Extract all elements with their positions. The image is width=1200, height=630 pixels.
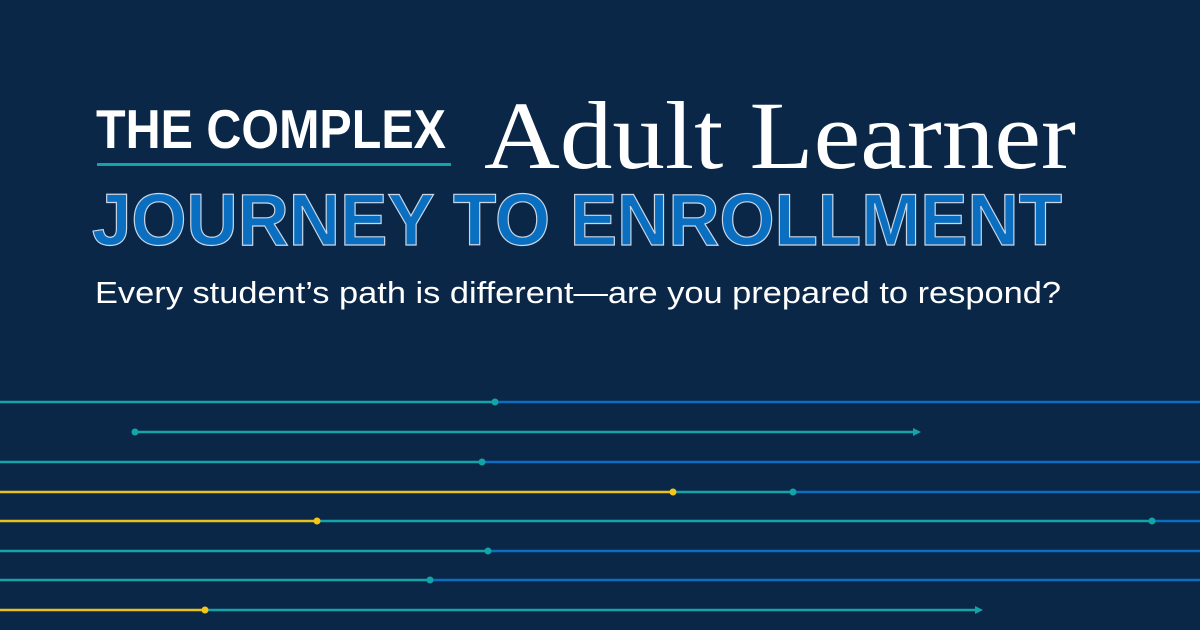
path 2	[132, 428, 921, 436]
title: THE COMPLEX: THE COMPLEX	[96, 98, 446, 160]
path 4	[0, 488, 1200, 496]
path 6	[0, 548, 1200, 554]
path lines chart	[0, 398, 1200, 614]
path 5	[0, 518, 1200, 524]
title: Adult Learner: Adult Learner	[484, 82, 1076, 189]
path 3	[0, 458, 1200, 466]
path 7	[0, 576, 1200, 584]
subtitle: Every student’s path is different—are you prepared to respond?	[95, 275, 1061, 310]
title: JOURNEY TO ENROLLMENT: JOURNEY TO ENROLLMENT	[92, 180, 1062, 261]
path 1	[0, 398, 1200, 406]
path 8	[0, 606, 983, 614]
